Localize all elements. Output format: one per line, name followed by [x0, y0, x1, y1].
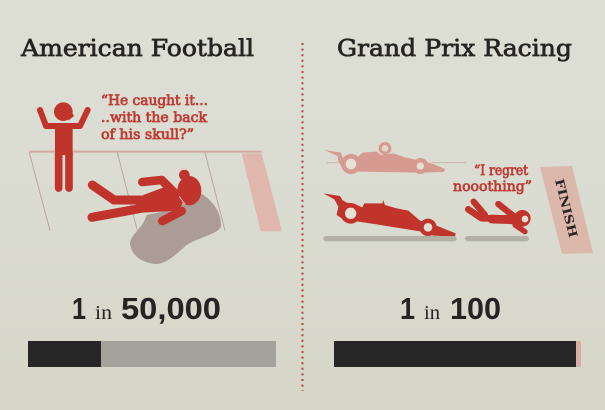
icon: fallen player [92, 169, 201, 221]
stat: 1 in 100 [400, 291, 501, 326]
racing illustration [323, 142, 531, 241]
progress bar: football [28, 341, 276, 367]
stat: 1 in 50,000 [72, 291, 221, 326]
quote: football: ..with the back [101, 110, 208, 126]
finish label: FINISH [552, 177, 580, 239]
title: Grand Prix Racing: Grand Prix Racing [337, 36, 572, 62]
progress bar: racing [334, 341, 581, 367]
shadow blob [130, 193, 221, 264]
stat: 1 in 100: 1 [400, 291, 415, 326]
quote: racing: “I regret [474, 163, 528, 179]
icon: flying driver [468, 202, 531, 232]
stat: 1 in 50,000: 1 [72, 291, 86, 326]
quote: football: of his skull?” [101, 127, 194, 143]
stat: 1 in 50,000: in [95, 302, 112, 324]
driver shadow [465, 236, 529, 241]
icon: standing referee [40, 102, 88, 188]
quote: football: “He caught it... [101, 93, 208, 109]
stat: 1 in 100: 100 [450, 291, 501, 326]
stat: 1 in 50,000: 50,000 [121, 291, 221, 326]
stat: 1 in 100: in [424, 302, 440, 324]
title: American Football: American Football [20, 36, 254, 62]
quote: racing: nooothing” [453, 179, 532, 195]
football illustration [29, 102, 282, 264]
car shadow [323, 236, 457, 241]
football field [29, 152, 282, 231]
icon: pale racing car [324, 142, 467, 174]
finish banner [540, 166, 593, 254]
icon: crashing racing car [323, 193, 456, 237]
